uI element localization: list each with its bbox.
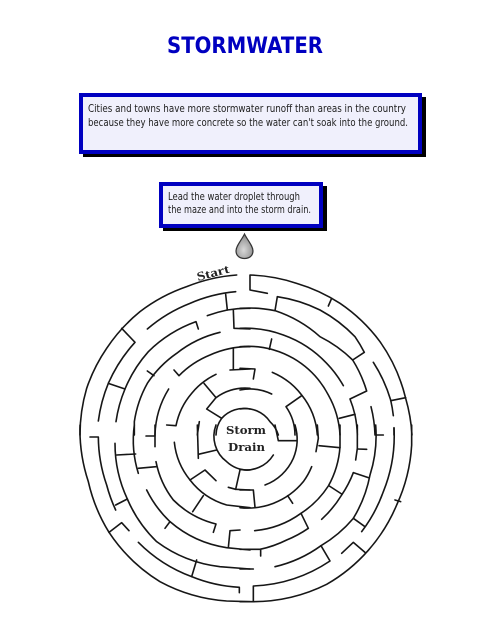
- panel: intro text: Cities and towns have more stormwater runoff than areas in the country: [88, 104, 406, 115]
- maze: north-west quadrant: [80, 275, 250, 435]
- icon: water droplet: [236, 234, 253, 258]
- title: STORMWATER: [167, 34, 323, 59]
- maze: south-east quadrant: [240, 425, 412, 602]
- panel: intro text: [81, 95, 426, 157]
- label: storm drain: [226, 423, 266, 454]
- maze: south-west quadrant: [80, 425, 250, 602]
- label: storm drain: Storm: [226, 423, 266, 437]
- panel: instructions: the maze and into the storm drain.: [168, 205, 311, 216]
- maze: [80, 275, 412, 602]
- label: storm drain: Drain: [228, 440, 266, 454]
- label: start: Start: [195, 262, 232, 284]
- maze: north-east quadrant: [240, 275, 412, 435]
- panel: instructions: Lead the water droplet through: [168, 192, 300, 203]
- panel: instructions: [161, 184, 327, 231]
- panel: intro text: because they have more concrete so the water can't soak into the ground.: [88, 118, 408, 129]
